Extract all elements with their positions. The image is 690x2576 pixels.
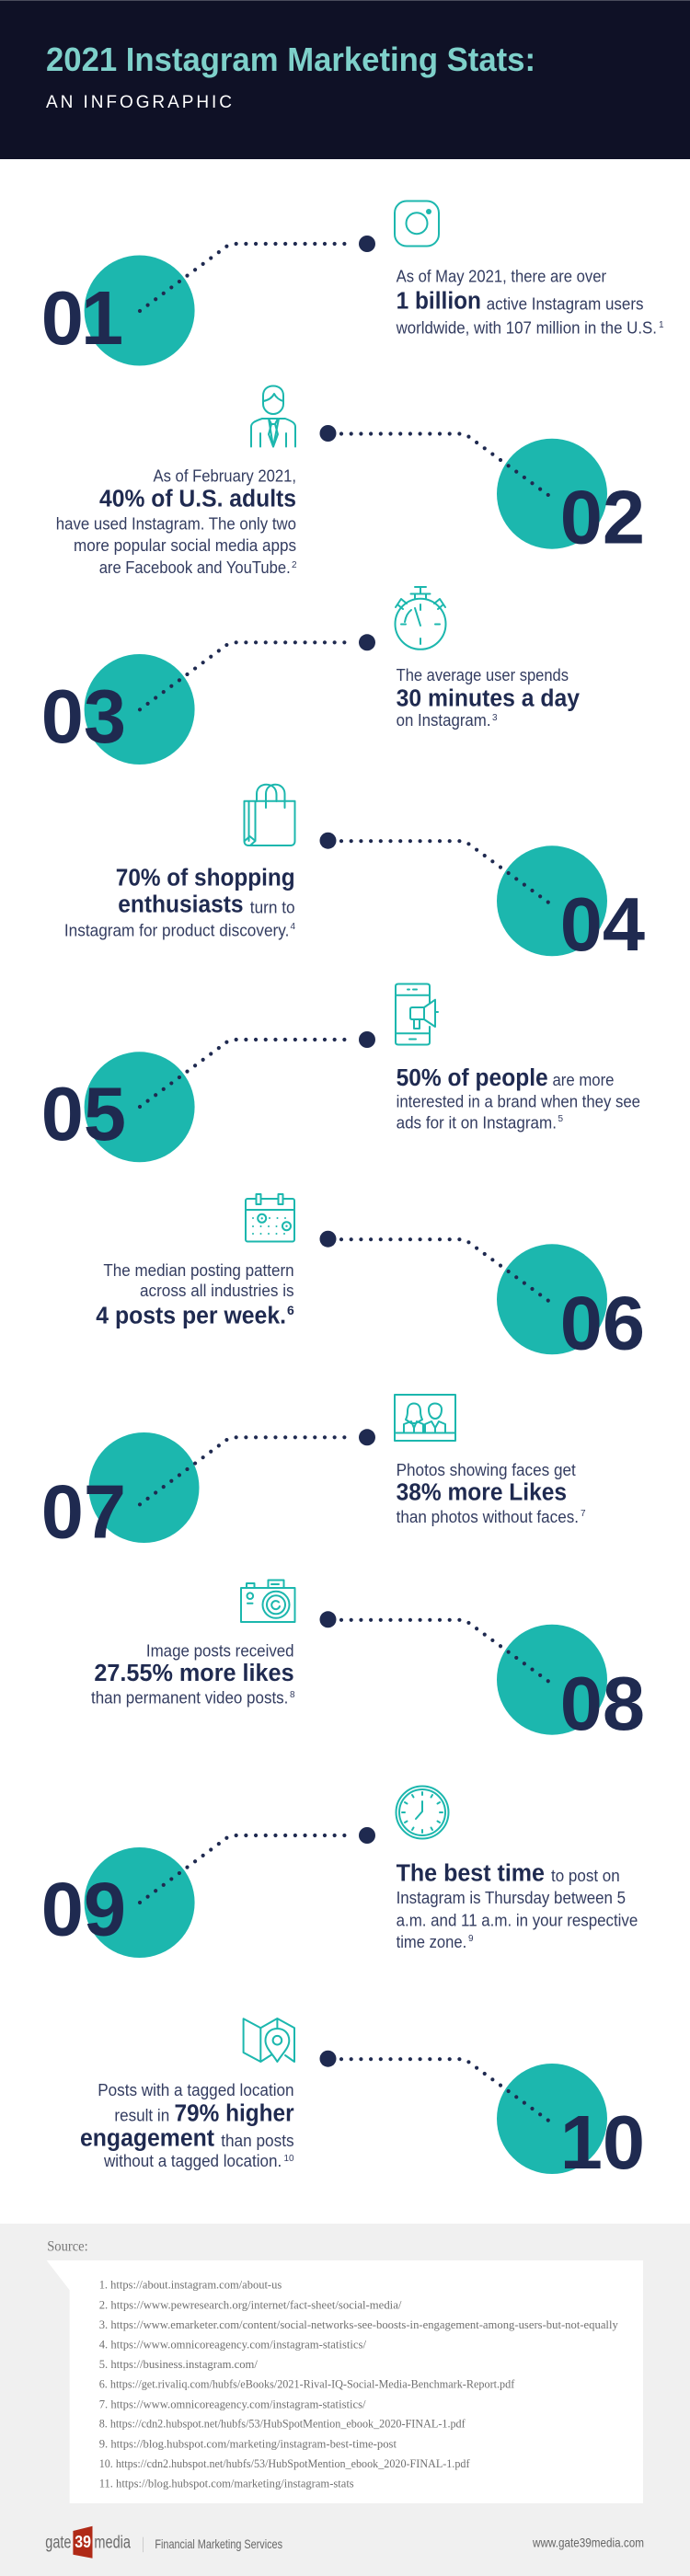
text block: on Instagram. (397, 711, 491, 730)
stat 10 (80, 2018, 645, 2185)
number: 03 (41, 673, 126, 759)
source links: 8. https://cdn2.hubspot.net/hubfs/53/HubSpotMention_ebook_2020-FINAL-1.pdf (99, 2417, 466, 2431)
text block: As of February 2021, (153, 466, 296, 485)
text block: to post on (551, 1867, 620, 1885)
text block: 79% higher (175, 2101, 294, 2127)
text block (96, 1261, 294, 1329)
number: 06 (560, 1281, 645, 1366)
stat 09 (41, 1787, 638, 1958)
icon: business person (251, 386, 295, 447)
text block (397, 666, 581, 730)
tagline: Financial Marketing Services (155, 2536, 282, 2551)
circle (497, 2064, 607, 2174)
number: 09 (41, 1866, 126, 1952)
text block (80, 2081, 294, 2170)
dotted connector (341, 1239, 556, 1306)
icon: shopping bag (245, 785, 294, 845)
source links: 1. https://about.instagram.com/about-us (99, 2278, 282, 2292)
text block: Posts with a tagged location (98, 2081, 294, 2099)
stat 06 (96, 1194, 645, 1366)
end dot (320, 833, 337, 849)
logo: media (94, 2533, 131, 2552)
text block: ads for it on Instagram. (397, 1113, 557, 1132)
subtitle: AN INFOGRAPHIC (46, 93, 232, 112)
text block: Instagram for product discovery. (64, 921, 289, 939)
icon: calendar (246, 1194, 294, 1242)
text block: enthusiasts (118, 892, 244, 918)
source section (0, 2224, 690, 2576)
text block: 3 (492, 713, 498, 723)
text block: than posts (221, 2132, 294, 2150)
text block: turn to (250, 898, 295, 916)
text block: 6 (287, 1303, 294, 1317)
number: 02 (560, 475, 645, 560)
circle (497, 1625, 607, 1735)
circle (88, 1432, 199, 1543)
text block: have used Instagram. The only two (56, 514, 296, 533)
dotted connector (140, 642, 353, 709)
text block: 8 (290, 1690, 295, 1700)
icon: map with pin (244, 2018, 294, 2062)
text block: 7 (581, 1509, 586, 1519)
text block: Image posts received (146, 1641, 294, 1660)
text block (397, 1860, 638, 1951)
text block (397, 1065, 640, 1132)
logo: 39 (75, 2533, 91, 2551)
text block: across all industries is (140, 1282, 294, 1300)
text block (397, 1461, 586, 1526)
source links: 5. https://business.instagram.com/ (99, 2357, 258, 2371)
text block: than permanent video posts. (91, 1689, 288, 1708)
text block: 50% of people (397, 1065, 548, 1091)
source links: 10. https://cdn2.hubspot.net/hubfs/53/HubSpotMention_ebook_2020-FINAL-1.pdf (99, 2456, 470, 2470)
text block: time zone. (397, 1933, 466, 1951)
circle (85, 256, 195, 366)
text block: 27.55% more likes (94, 1661, 294, 1686)
dotted connector (140, 1437, 353, 1504)
dotted connector (341, 2059, 556, 2126)
text block: than photos without faces. (397, 1508, 579, 1526)
number: 10 (560, 2099, 645, 2185)
text block: 4 (291, 922, 296, 932)
end dot (359, 1827, 375, 1844)
icon: framed faces (395, 1395, 455, 1441)
text block: more popular social media apps (74, 536, 296, 555)
text block: a.m. and 11 a.m. in your respective (397, 1911, 638, 1929)
text block: engagement (80, 2125, 214, 2151)
text block: worldwide, with 107 million in the U.S. (396, 318, 657, 337)
text block: The median posting pattern (103, 1261, 294, 1280)
circle (497, 1244, 607, 1354)
text block: Photos showing faces get (397, 1461, 576, 1479)
end dot (320, 1231, 337, 1248)
text block: As of May 2021, there are over (397, 268, 606, 286)
text block: 1 (659, 320, 664, 330)
icon: instagram (395, 201, 439, 247)
number: 07 (41, 1468, 126, 1555)
dotted connector (140, 244, 353, 311)
end dot (359, 634, 375, 650)
text block: 10 (283, 2154, 294, 2164)
dotted connector (341, 841, 556, 908)
number: 08 (560, 1661, 645, 1746)
footer (45, 2526, 644, 2559)
source links: 6. https://get.rivaliq.com/hubfs/eBooks/2021-Rival-IQ-Social-Media-Benchmark-Report.pdf (99, 2377, 515, 2391)
text block: Instagram is Thursday between 5 (397, 1889, 626, 1907)
dotted connector (341, 434, 556, 500)
icon: phone with megaphone (396, 984, 438, 1045)
circle (497, 845, 607, 956)
source links: 4. https://www.omnicoreagency.com/instagram-statistics/ (99, 2337, 366, 2351)
icon: stopwatch (396, 587, 445, 650)
end dot (320, 425, 337, 442)
end dot (359, 236, 375, 252)
stat 08 (91, 1581, 645, 1746)
text block: result in (114, 2107, 169, 2125)
text block: 2 (292, 560, 297, 570)
dotted connector (341, 1620, 556, 1686)
header banner (0, 0, 690, 159)
source links: 3. https://www.emarketer.com/content/social-networks-see-boosts-in-engagement-among-users-but-not-equally (99, 2317, 618, 2331)
logo (45, 2526, 131, 2559)
text block: The best time (397, 1860, 545, 1886)
website: www.gate39media.com (532, 2536, 644, 2550)
dotted connector (140, 1040, 353, 1107)
number: 04 (560, 881, 645, 967)
end dot (320, 2051, 337, 2067)
source links: 7. https://www.omnicoreagency.com/instagram-statistics/ (99, 2397, 366, 2410)
source links: 9. https://blog.hubspot.com/marketing/instagram-best-time-post (99, 2436, 397, 2450)
stat 02 (56, 386, 645, 577)
text block: 5 (558, 1114, 563, 1124)
text block: 9 (468, 1934, 474, 1944)
end dot (359, 1031, 375, 1048)
icon: clock (396, 1787, 449, 1838)
circle (85, 1052, 195, 1162)
source heading: Source: (47, 2239, 88, 2255)
text block (396, 268, 664, 337)
circle (85, 1847, 195, 1958)
stat 04 (64, 785, 645, 967)
text block: active Instagram users (487, 295, 644, 314)
logo: gate (45, 2533, 72, 2552)
number: 01 (41, 275, 123, 361)
end dot (359, 1429, 375, 1445)
text block: are Facebook and YouTube. (99, 558, 291, 577)
text block: 30 minutes a day (397, 685, 581, 711)
source links: 2. https://www.pewresearch.org/internet/fact-sheet/social-media/ (99, 2297, 402, 2311)
source links: 11. https://blog.hubspot.com/marketing/instagram-stats (99, 2477, 354, 2490)
stat 03 (41, 587, 581, 765)
circle (85, 654, 195, 765)
text block: 4 posts per week. (96, 1304, 286, 1329)
text block: 38% more Likes (397, 1480, 567, 1506)
text block (56, 466, 297, 577)
text block: without a tagged location. (103, 2152, 282, 2170)
stat 01 (41, 201, 664, 366)
source links (99, 2278, 618, 2490)
stat 05 (41, 984, 640, 1162)
icon: camera (241, 1581, 294, 1622)
title: 2021 Instagram Marketing Stats: (46, 40, 535, 78)
text block: 1 billion (397, 289, 481, 315)
text block: 70% of shopping (116, 865, 295, 891)
text block (91, 1641, 295, 1708)
text block: The average user spends (397, 666, 569, 684)
end dot (320, 1611, 337, 1627)
text block: 40% of U.S. adults (99, 487, 296, 512)
source list panel (47, 2260, 643, 2503)
text block: interested in a brand when they see (397, 1092, 640, 1110)
number: 05 (41, 1071, 126, 1156)
circle (497, 439, 607, 549)
stat 07 (41, 1395, 586, 1555)
text block (64, 865, 296, 939)
text block: are more (552, 1071, 615, 1089)
dotted connector (140, 1835, 353, 1903)
